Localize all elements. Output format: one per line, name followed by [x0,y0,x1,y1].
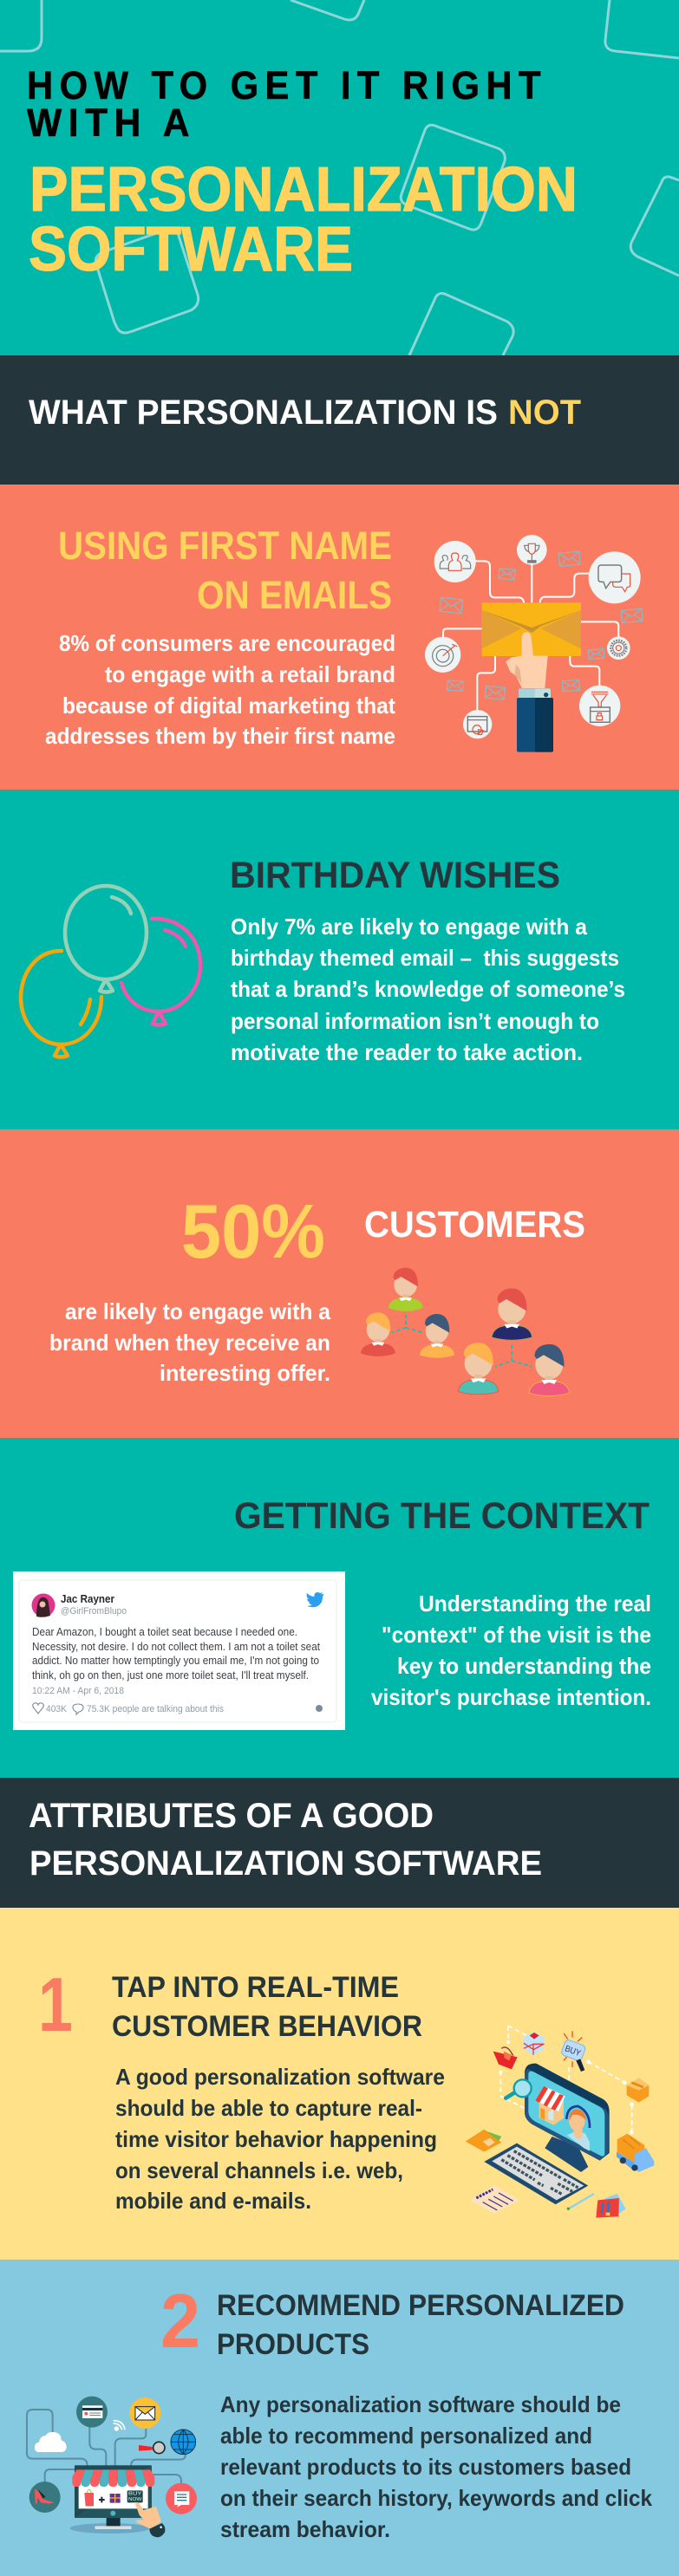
awning [72,2469,154,2487]
heading: NOT [508,394,581,432]
text block [371,1590,651,1710]
title [27,63,578,284]
tweet screenshot [13,1571,345,1730]
circle icons [76,2397,108,2428]
title: PERSONALIZATION [29,155,578,224]
heading: USING FIRST NAME [58,524,392,568]
text block: "context" of the visit is the [382,1622,651,1648]
tweet screenshot: Jac Rayner [61,1593,114,1605]
pen [569,2194,594,2208]
heading: ON EMAILS [197,573,392,617]
tweet text: addict. No matter how temptingly you email me, I'm not going to [32,1655,319,1667]
products [84,2493,94,2506]
cloud [35,2432,67,2452]
people icon lines [433,543,630,735]
paper [470,2185,519,2214]
tweet text: Dear Amazon, I bought a toilet seat because I needed one. [32,1626,297,1638]
panel: attribute 1 [0,1908,679,2260]
text block: 8% of consumers are encouraged [59,630,395,656]
basket [493,2052,518,2069]
panel: birthday wishes [0,790,679,1129]
heading: CUSTOMERS [364,1204,585,1246]
heading [112,1971,422,2043]
panel: getting the context [0,1438,679,1778]
icon: online shop illustration: BUY [128,2492,142,2497]
panel: attribute 2 [0,2260,679,2576]
keyboard [484,2143,588,2204]
text block [115,2064,445,2214]
panel: what personalization is not banner [0,355,679,485]
text block: on several channels i.e. web, [115,2157,403,2183]
text block: on their search history, keywords and click [220,2485,653,2511]
truck [617,2134,644,2163]
stand [545,2137,588,2172]
text block: are likely to engage with a [65,1298,330,1324]
icon: isometric computer and shopping illustration [466,2026,654,2218]
wallet [466,2130,501,2152]
statistic: 50% [181,1188,325,1274]
panel: hero [0,0,679,355]
text block: should be able to capture real- [115,2095,422,2121]
panel: using first name on emails [0,485,679,790]
heading: GETTING THE CONTEXT [234,1495,650,1537]
text block: Any personalization software should be [220,2391,621,2417]
avatar [31,1593,55,1617]
text block: motivate the reader to take action. [231,1039,583,1065]
tweet stats: 75.3K people are talking about this [87,1704,224,1714]
icon: online shop illustration: NOW [128,2497,142,2502]
title: SOFTWARE [29,215,353,284]
heading: CUSTOMER BEHAVIOR [112,2010,422,2043]
text block: mobile and e-mails. [115,2188,311,2214]
text block [45,630,395,749]
heading: RECOMMEND PERSONALIZED [217,2289,624,2322]
panel: attributes banner [0,1778,679,1908]
text block [231,914,625,1065]
heading: BIRTHDAY WISHES [230,855,560,896]
text block [220,2391,653,2542]
number: 1 [38,1961,73,2047]
text block: Only 7% are likely to engage with a [231,914,588,940]
tweet screenshot: @GirlFromBlupo [61,1606,127,1617]
title: HOW TO GET IT RIGHT [27,63,547,107]
tweet stats [33,1703,323,1714]
text block: birthday themed email – this suggests [231,945,619,971]
envelope [482,602,581,656]
monitor [70,2523,150,2534]
heading [29,1797,542,1883]
icon: email network illustration [425,535,643,752]
heading: PERSONALIZATION SOFTWARE [29,1844,542,1883]
tweet text [32,1626,320,1682]
heading: TAP INTO REAL-TIME [112,1971,399,2004]
text block: time visitor behavior happening [115,2126,437,2152]
heading [58,524,392,617]
hand [506,632,548,688]
cardboard box [627,2078,649,2103]
tweet stats: 403K [46,1704,68,1714]
text block: able to recommend personalized and [220,2423,592,2449]
title: WITH A [27,101,196,145]
text block: addresses them by their first name [45,723,395,749]
text block: Understanding the real [419,1590,651,1617]
text block: relevant products to its customers based [220,2454,631,2480]
icon: online shop illustration [27,2397,197,2537]
decorative rounded squares [0,0,679,355]
heading: WHAT PERSONALIZATION IS [29,394,498,432]
icon: isometric computer and shopping illustration: BUY [564,2044,582,2059]
tweet screenshot: 10:22 AM - Apr 6, 2018 [32,1686,124,1696]
text block: stream behavior. [220,2516,390,2542]
icon: balloons [21,886,200,1057]
text block: interesting offer. [160,1360,330,1386]
text block: personal information isn’t enough to [231,1008,599,1034]
text block [49,1298,330,1386]
icon: customer groups [361,1268,570,1395]
text block: because of digital marketing that [62,693,395,719]
tweet text: Necessity, not desire. I do not collect them. I am not a toilet seat [32,1641,320,1653]
heading: PRODUCTS [217,2328,369,2361]
text block: A good personalization software [115,2064,445,2090]
heading [217,2289,624,2361]
text block: key to understanding the [397,1653,651,1679]
panel: 50% customers [0,1129,679,1438]
text block: brand when they receive an [49,1330,330,1356]
wifi [114,2426,119,2431]
buy tag [564,2031,582,2067]
heading: ATTRIBUTES OF A GOOD [29,1797,434,1835]
magnifier [506,2091,516,2098]
text block: that a brand’s knowledge of someone’s [231,976,625,1002]
monitor [525,2064,610,2161]
hand [134,2502,161,2529]
icon: bird [307,1592,323,1607]
tweet text: think, oh go on then, just one more toilet seat, I'll treat myself. [32,1669,309,1682]
text block: visitor's purchase intention. [371,1684,651,1710]
credit card [604,2194,626,2214]
gift [523,2032,544,2056]
text block: to engage with a retail brand [105,661,395,687]
agent [567,2130,590,2151]
magnifier [139,2445,153,2451]
shop [539,2099,564,2125]
number: 2 [160,2278,200,2364]
